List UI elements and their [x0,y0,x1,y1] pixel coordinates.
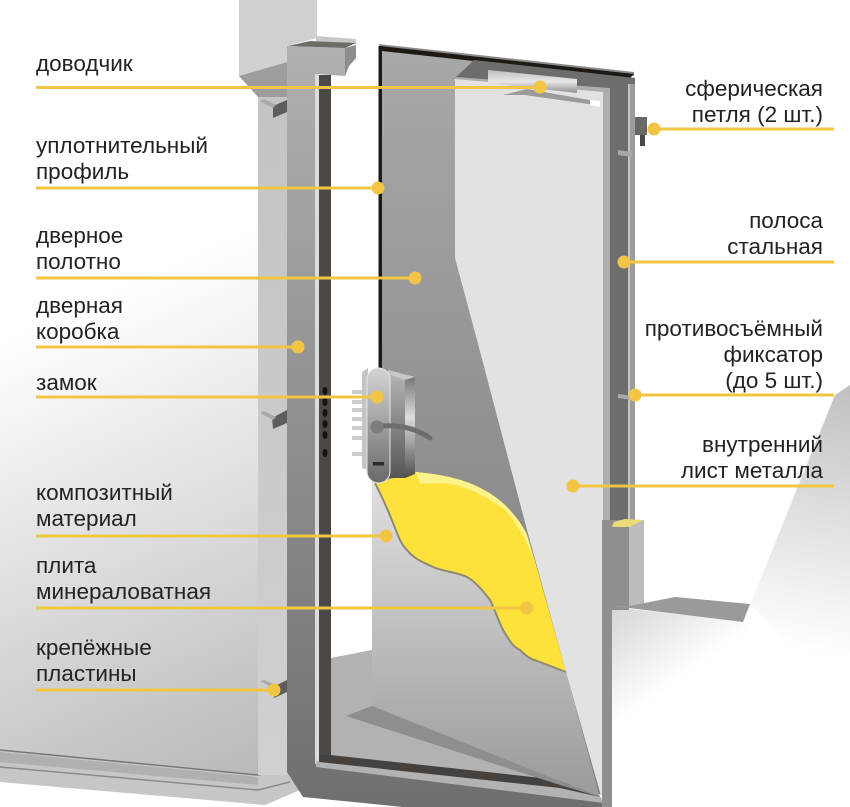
label: композитный материал [36,480,173,531]
mounting plates [260,99,287,698]
label: полоса стальная: стальная [727,234,823,259]
label: противосъёмный фиксатор: противосъёмный [645,316,823,341]
label: уплотнительный профиль: уплотнительный [36,133,208,158]
door floor [331,650,597,795]
inner metal sheet [455,79,603,796]
label: противосъёмный фиксатор: фиксатор [723,342,823,367]
door lower face [372,480,600,797]
right wall [750,385,850,700]
label: плита минераловатная: минераловатная [36,579,211,604]
door bottom shadow [346,706,600,797]
label: плита минераловатная [36,553,211,604]
label: противосъёмный фиксатор [645,316,823,393]
label: внутренний лист металла [681,432,823,483]
label: уплотнительный профиль: профиль [36,159,129,184]
label: дверная коробка: коробка [36,319,120,344]
label: дверное полотно: полотно [36,249,121,274]
wall column [258,97,287,775]
label: уплотнительный профиль [36,133,208,184]
label: дверная коробка: дверная [36,293,123,318]
label: крепёжные пластины [36,635,152,686]
label: крепёжные пластины: крепёжные [36,635,152,660]
upper wall [239,0,317,100]
callout dots [268,80,660,696]
label: полоса стальная: полоса [749,208,823,233]
door frame [287,36,612,807]
callout lines [36,88,834,690]
label: дверное полотно: дверное [36,223,123,248]
label: внутренний лист металла: внутренний [702,432,823,457]
label: сферическая петля: сферическая [685,76,823,101]
label: дверное полотно [36,223,123,274]
hinge [635,117,647,146]
label: крепёжные пластины: пластины [36,661,137,686]
label: полоса стальная [727,208,823,259]
door closer [488,70,600,107]
right floor [612,607,750,800]
label: плита минераловатная: плита [36,553,97,578]
label: композитный материал: композитный [36,480,173,505]
lower door strip [602,519,750,807]
label: внутренний лист металла: лист металла [681,458,823,483]
label: композитный материал: материал [36,506,137,531]
label: дверная коробка [36,293,123,344]
door leaf [372,44,635,795]
label: сферическая петля [685,76,823,127]
label: замок: замок [36,370,97,395]
left wall [0,0,258,776]
label: противосъёмный фиксатор: (до 5 шт.) [725,368,823,393]
frame holes [322,387,328,457]
lock [352,368,430,483]
anti-removal pins [618,150,632,400]
label: сферическая петля: петля (2 шт.) [692,102,823,127]
label: доводчик: доводчик [36,51,133,76]
mineral wool [375,472,566,672]
baseboard [0,750,300,805]
